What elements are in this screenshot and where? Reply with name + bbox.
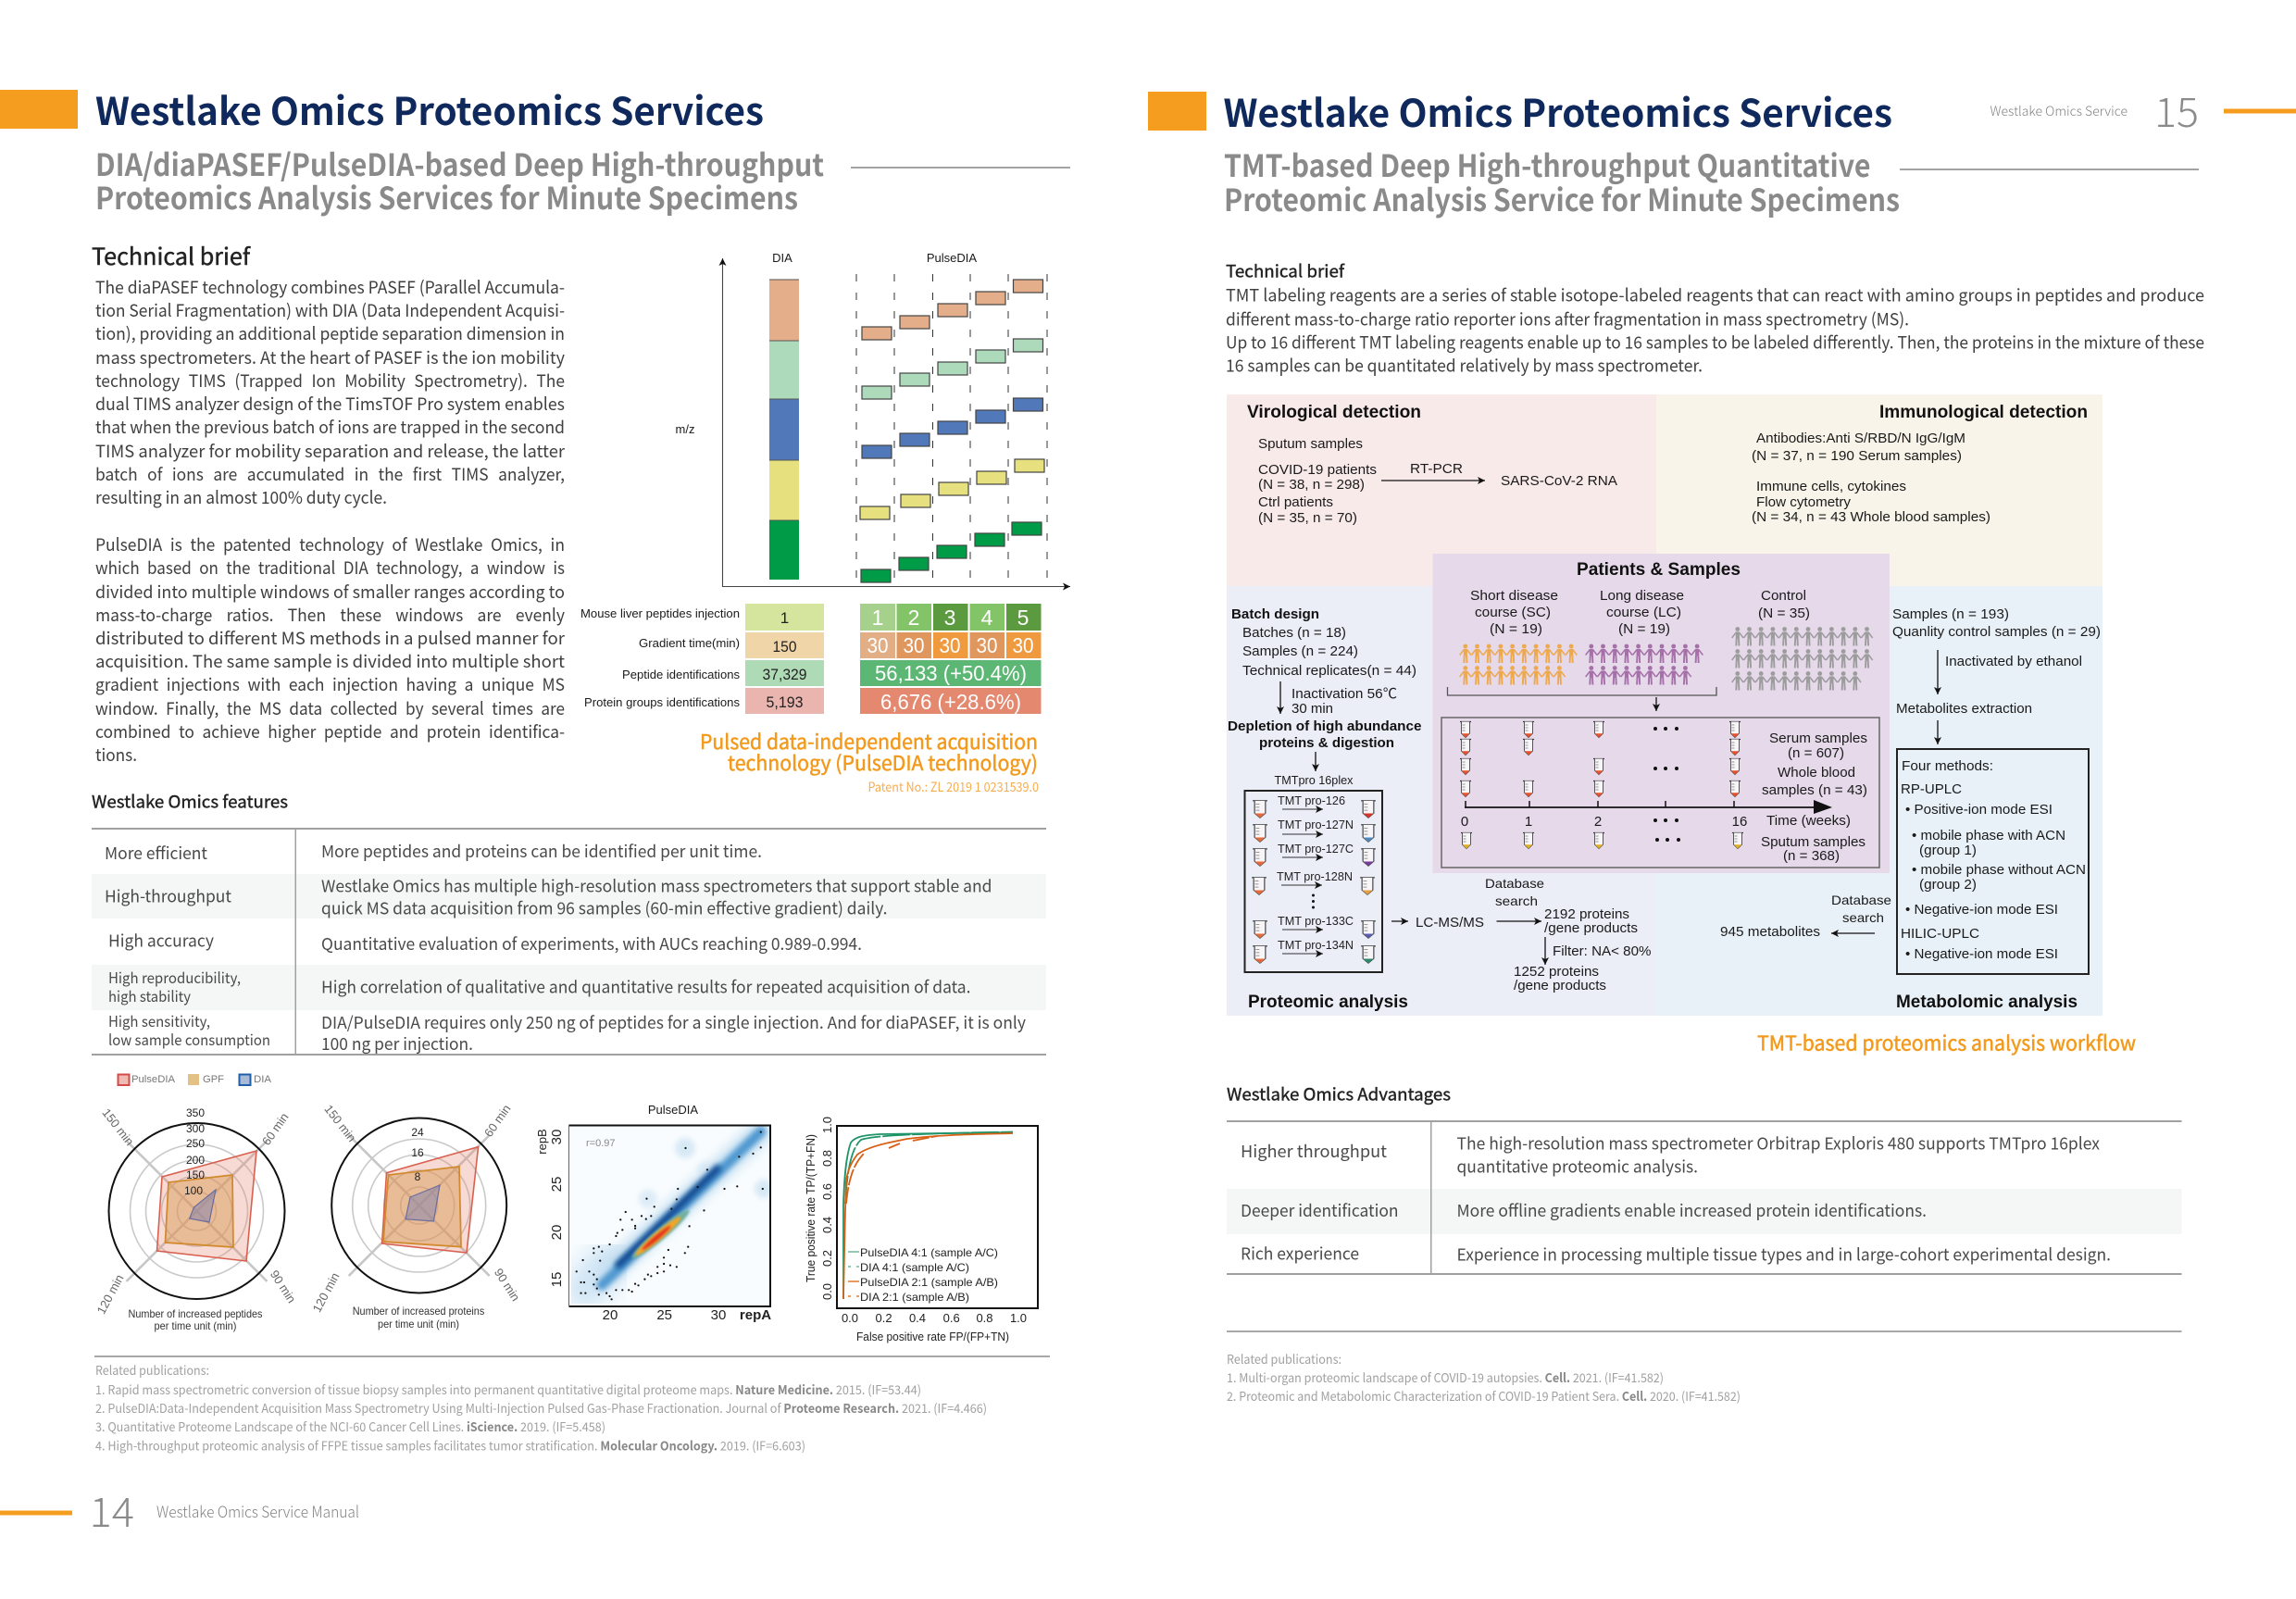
subtitle xyxy=(1224,142,1900,220)
text block: diaPASEF description: resulting in an almost 100% duty cycle. xyxy=(95,485,387,509)
text block: PulseDIA description: distributed to different MS methods in a pulsed manner for xyxy=(95,626,566,650)
text block: diaPASEF description: The diaPASEF technology combines PASEF (Parallel Accumula- xyxy=(95,275,565,299)
comparison table: DIA vs PulseDIA: 30 xyxy=(939,633,961,657)
panel: immunological detection: Immunological detection xyxy=(1879,403,2088,422)
radar chart: peptides: 250 xyxy=(186,1137,205,1150)
sample timeline box xyxy=(1441,718,1879,868)
radar chart: proteins xyxy=(310,1102,523,1330)
comparison table: DIA vs PulseDIA: 30 xyxy=(976,633,998,657)
radar chart: proteins: 16 xyxy=(411,1146,424,1159)
sample timeline box: samples (n = 43) xyxy=(1762,782,1867,798)
page footer xyxy=(0,1480,359,1539)
TMT labeling box: TMT pro-128N xyxy=(1277,870,1353,883)
table: features: High accuracy xyxy=(108,928,215,952)
orange header block xyxy=(1148,92,1206,131)
comparison table: DIA vs PulseDIA: 1 xyxy=(780,609,789,627)
subtitle: DIA/diaPASEF/PulseDIA-based Deep High-throughput xyxy=(95,141,824,185)
panel: metabolomic analysis: Metabolites extraction xyxy=(1896,701,2032,717)
comparison table: DIA vs PulseDIA: 30 xyxy=(1013,633,1033,657)
table: advantages xyxy=(1227,1120,2181,1275)
scatter plot: PulseDIA repA vs repB: r=0.97 xyxy=(586,1138,615,1149)
panel: proteomic analysis: /gene products xyxy=(1514,978,1606,993)
TMT labeling box: TMT pro-126 xyxy=(1278,794,1345,807)
panel: virological detection: (N = 35, n = 70) xyxy=(1258,510,1357,526)
TMT labeling box: TMT pro-127C xyxy=(1278,843,1354,856)
panel: patients and samples: Short disease xyxy=(1470,588,1558,604)
text block: diaPASEF description: TIMS analyzer for mobility separation and release, the latter xyxy=(95,439,566,463)
table: advantages: Deeper identification xyxy=(1241,1198,1398,1222)
panel: patients and samples: (N = 19) xyxy=(1618,621,1670,637)
table: features: low sample consumption xyxy=(108,1028,270,1050)
comparison table: DIA vs PulseDIA: Mouse liver peptides injection xyxy=(580,606,740,620)
radar chart: peptides: 90 min xyxy=(268,1268,299,1305)
text block: PulseDIA description: tions. xyxy=(95,743,137,767)
table: advantages: The high-resolution mass spectrometer Orbitrap Exploris 480 supports TMTpro 16plex xyxy=(1457,1131,2100,1156)
text block: PulseDIA description: combined to achieve higher peptide and protein identifica- xyxy=(95,719,565,743)
panel: proteomic analysis: 2192 proteins xyxy=(1544,906,1629,922)
ROC curve chart: PulseDIA 2:1 (sample A/B) xyxy=(860,1276,998,1289)
text block: diaPASEF description: batch of ions are accumulated in the first TIMS analyzer, xyxy=(95,462,565,486)
text block: PulseDIA description: gradient injections with each injection having a unique MS xyxy=(95,672,565,696)
scatter plot: PulseDIA repA vs repB: 20 xyxy=(603,1307,618,1323)
ROC curve chart: 0.6 xyxy=(820,1183,834,1200)
ROC curve chart: 0.2 xyxy=(876,1311,892,1325)
comparison table: DIA vs PulseDIA: 3 xyxy=(944,606,955,630)
text block: diaPASEF description xyxy=(95,275,566,509)
four methods box: • mobile phase without ACN xyxy=(1912,862,2086,878)
caption: workflow: TMT-based proteomics analysis workflow xyxy=(1757,1028,2136,1057)
panel: patients and samples: Patients & Samples xyxy=(1577,560,1741,580)
right page xyxy=(1148,80,2296,1405)
radar chart: peptides: 150 xyxy=(186,1168,205,1181)
page footer: 14 xyxy=(89,1480,134,1539)
heading: Westlake Omics features: Westlake Omics features xyxy=(92,789,288,813)
comparison table: DIA vs PulseDIA: 1 xyxy=(872,606,883,630)
legend: radar charts xyxy=(119,1074,272,1085)
text block: technical brief: 16 samples can be quantitated relatively by mass spectrometer. xyxy=(1226,354,1703,378)
text block: PulseDIA description xyxy=(95,532,566,767)
ROC curve chart: False positive rate FP/(FP+TN) xyxy=(856,1330,1009,1343)
subtitle: Proteomic Analysis Service for Minute Specimens xyxy=(1224,176,1900,220)
scatter plot: PulseDIA repA vs repB xyxy=(535,1103,773,1323)
sample timeline box: 16 xyxy=(1732,814,1747,830)
radar chart: proteins: 8 xyxy=(415,1170,421,1183)
radar chart: peptides: 200 xyxy=(186,1154,205,1167)
panel: proteomic analysis: 30 min xyxy=(1292,701,1333,717)
panel: virological detection: Virological detection xyxy=(1247,403,1421,422)
title: Westlake Omics Proteomics Services xyxy=(1224,82,1892,138)
sample timeline box: Whole blood xyxy=(1778,765,1855,781)
TMT labeling box: TMT pro-134N xyxy=(1278,939,1354,952)
panel: proteomic analysis: Samples (n = 224) xyxy=(1242,643,1358,659)
scatter plot: PulseDIA repA vs repB: 20 xyxy=(549,1225,565,1240)
panel: virological detection: COVID-19 patients xyxy=(1258,462,1377,478)
legend: radar charts: DIA xyxy=(254,1074,272,1085)
ROC curve chart: 0.4 xyxy=(909,1311,926,1325)
four methods box: (group 1) xyxy=(1919,843,1977,858)
radar chart: peptides: 350 xyxy=(186,1106,205,1119)
chart: DIA vs PulseDIA windows: DIA xyxy=(772,251,792,265)
table: features xyxy=(92,828,1046,1056)
text block: diaPASEF description: that when the previous batch of ions are trapped in the second xyxy=(95,415,565,439)
caption: PulseDIA technology: Pulsed data-independent acquisition xyxy=(700,726,1038,756)
sample timeline box: 2 xyxy=(1594,814,1602,830)
ROC curve chart: 0.2 xyxy=(820,1250,834,1267)
related publications xyxy=(95,1360,987,1454)
comparison table: DIA vs PulseDIA: 30 xyxy=(904,633,924,657)
radar chart: proteins: 60 min xyxy=(481,1102,514,1140)
panel: metabolomic analysis xyxy=(1656,586,2103,1016)
related publications: 1. Rapid mass spectrometric conversion of tissue biopsy samples into permanent quantitative digital proteome maps. Nature Medicine. 2015. (IF=53.44) xyxy=(95,1380,921,1398)
page header xyxy=(1990,80,2296,139)
ROC curve chart: 1.0 xyxy=(820,1117,834,1133)
panel: proteomic analysis: Proteomic analysis xyxy=(1248,993,1408,1012)
text block: technical brief xyxy=(1226,259,2204,378)
text block: PulseDIA description: PulseDIA is the patented technology of Westlake Omics, in xyxy=(95,532,565,556)
left page xyxy=(0,81,1070,1539)
panel: immunological detection: Immune cells, cytokines xyxy=(1756,479,1906,494)
panel: proteomic analysis: proteins & digestion xyxy=(1259,735,1394,751)
ROC curve chart: 0.6 xyxy=(943,1311,960,1325)
text block: diaPASEF description: mass spectrometers. At the heart of PASEF is the ion mobility xyxy=(95,345,565,369)
people icons: long disease course xyxy=(1586,644,1703,685)
panel: immunological detection: (N = 37, n = 190 Serum samples) xyxy=(1752,448,1962,464)
panel: patients and samples: Long disease xyxy=(1600,588,1684,604)
text block: PulseDIA description: acquisition. The same sample is divided into multiple short xyxy=(95,649,565,673)
panel: metabolomic analysis: Inactivated by ethanol xyxy=(1945,654,2082,669)
text block: technical brief: Up to 16 different TMT labeling reagents enable up to 16 samples to be labeled differently. Then, the proteins in the mixture of these xyxy=(1226,330,2204,354)
radar chart: proteins: 24 xyxy=(411,1126,424,1139)
subtitle: Proteomics Analysis Services for Minute Specimens xyxy=(95,174,798,219)
text block: diaPASEF description: tion Serial Fragmentation) with DIA (Data Independent Acquisi- xyxy=(95,298,565,322)
table: advantages: Higher throughput xyxy=(1241,1139,1387,1163)
table: features: High correlation of qualitative and quantitative results for repeated acquisition of data. xyxy=(321,974,970,998)
comparison table: DIA vs PulseDIA: Peptide identifications xyxy=(622,668,740,681)
radar chart: peptides: 300 xyxy=(186,1122,205,1135)
panel: patients and samples: (N = 19) xyxy=(1490,621,1542,637)
chart: DIA vs PulseDIA windows: PulseDIA xyxy=(927,251,977,265)
panel: proteomic analysis: 1252 proteins xyxy=(1514,964,1599,980)
radar chart: peptides: 100 xyxy=(184,1184,203,1197)
panel: proteomic analysis: Batch design xyxy=(1231,606,1319,622)
panel: proteomic analysis: Batches (n = 18) xyxy=(1242,625,1346,641)
comparison table: DIA vs PulseDIA: Gradient time(min) xyxy=(639,636,740,650)
scatter plot: PulseDIA repA vs repB: 25 xyxy=(549,1177,565,1192)
panel: proteomic analysis: Depletion of high abundance xyxy=(1228,718,1422,734)
heading: technical brief: Technical brief xyxy=(92,239,251,272)
sample timeline box: Time (weeks) xyxy=(1766,813,1851,829)
table: features: High sensitivity, xyxy=(108,1009,210,1031)
caption: PulseDIA technology: technology (PulseDIA technology) xyxy=(728,747,1038,777)
table: features: DIA/PulseDIA requires only 250 ng of peptides for a single injection. And for diaPASEF, it is only xyxy=(321,1010,1027,1034)
panel: proteomic analysis: search xyxy=(1495,893,1538,908)
TMT labeling box: TMT pro-127N xyxy=(1278,818,1354,831)
legend: radar charts: GPF xyxy=(203,1074,224,1085)
radar chart: proteins: 120 min xyxy=(310,1270,343,1315)
panel: proteomic analysis: TMTpro 16plex xyxy=(1274,773,1354,787)
table: advantages: Experience in processing multiple tissue types and in large-cohort experimental design. xyxy=(1457,1243,2111,1267)
ROC curve chart xyxy=(804,1117,1038,1343)
table: features: More peptides and proteins can be identified per unit time. xyxy=(321,839,762,863)
four methods box: Four methods: xyxy=(1902,758,1993,774)
heading: Westlake Omics Advantages: Westlake Omics Advantages xyxy=(1227,1081,1451,1106)
ROC curve chart: True positive rate TP/(TP+FN) xyxy=(804,1134,817,1282)
workflow figure xyxy=(1227,394,2103,1016)
radar chart: peptides: per time unit (min) xyxy=(154,1319,237,1332)
panel: proteomic analysis: /gene products xyxy=(1544,920,1638,936)
subtitle: TMT-based Deep High-throughput Quantitative xyxy=(1224,142,1870,186)
panel: metabolomic analysis: search xyxy=(1842,910,1884,925)
panel: immunological detection: Antibodies:Anti S/RBD/N IgG/IgM xyxy=(1756,431,1965,446)
text block: PulseDIA description: mass-to-charge ratios. Then these windows are evenly xyxy=(95,603,565,627)
panel: immunological detection: (N = 34, n = 43 Whole blood samples) xyxy=(1752,509,1990,525)
chart: DIA vs PulseDIA windows: m/z xyxy=(676,422,694,436)
comparison table: DIA vs PulseDIA: 2 xyxy=(908,606,919,630)
ROC curve chart: 0.4 xyxy=(820,1217,834,1233)
four methods box: • Negative-ion mode ESI xyxy=(1905,902,2058,918)
radar chart: proteins: 150 min xyxy=(321,1102,359,1144)
comparison table: DIA vs PulseDIA xyxy=(580,604,1041,714)
table: features: Quantitative evaluation of experiments, with AUCs reaching 0.989-0.994. xyxy=(321,931,862,956)
scatter plot: PulseDIA repA vs repB: repB xyxy=(535,1129,549,1155)
panel: proteomic analysis: LC-MS/MS xyxy=(1416,915,1484,931)
ROC curve chart: DIA 4:1 (sample A/C) xyxy=(860,1261,969,1274)
panel: patients and samples: Control xyxy=(1761,588,1806,604)
table: features: More efficient xyxy=(105,841,207,865)
ROC curve chart: PulseDIA 4:1 (sample A/C) xyxy=(860,1246,998,1259)
radar chart: peptides: Number of increased peptides xyxy=(128,1307,263,1320)
panel: metabolomic analysis: Samples (n = 193) xyxy=(1892,606,2009,622)
table: features: quick MS data acquisition from 96 samples (60-min effective gradient) daily. xyxy=(321,896,887,920)
four methods box xyxy=(1897,749,2089,974)
panel: patients and samples: course (SC) xyxy=(1475,605,1551,620)
text block: PulseDIA description: which based on the traditional DIA technology, a window is xyxy=(95,556,565,580)
sample timeline box: Serum samples xyxy=(1769,731,1867,746)
scatter plot: PulseDIA repA vs repB: 30 xyxy=(549,1130,565,1144)
four methods box: • Negative-ion mode ESI xyxy=(1905,946,2058,962)
subtitle xyxy=(95,141,824,219)
panel: immunological detection xyxy=(1656,394,2103,586)
related publications: 4. High-throughput proteomic analysis of FFPE tissue samples facilitates tumor stratification. Molecular Oncology. 2019. (IF=6.603) xyxy=(95,1435,805,1454)
ROC curve chart: DIA 2:1 (sample A/B) xyxy=(860,1291,969,1304)
radar chart: proteins: 90 min xyxy=(492,1266,523,1304)
four methods box: • mobile phase with ACN xyxy=(1912,828,2065,843)
panel: metabolomic analysis: Quanlity control samples (n = 29) xyxy=(1892,624,2101,640)
comparison table: DIA vs PulseDIA: 30 xyxy=(867,633,889,657)
text block: PulseDIA description: window. Finally, the MS data collected by several times are xyxy=(95,696,565,720)
comparison table: DIA vs PulseDIA: 37,329 xyxy=(763,666,807,683)
ROC curve chart: 1.0 xyxy=(1010,1311,1027,1325)
panel: virological detection: SARS-CoV-2 RNA xyxy=(1501,473,1617,489)
panel: virological detection xyxy=(1227,394,1656,586)
panel: proteomic analysis xyxy=(1227,586,1656,1016)
people icons: short disease course xyxy=(1460,644,1577,685)
related publications xyxy=(1227,1349,1741,1405)
comparison table: DIA vs PulseDIA: 5 xyxy=(1017,606,1029,630)
panel: patients and samples xyxy=(1433,554,1890,873)
ROC curve chart: 0.8 xyxy=(820,1150,834,1167)
page footer: Westlake Omics Service Manual xyxy=(156,1499,359,1522)
four methods box: HILIC-UPLC xyxy=(1901,926,1979,942)
table: advantages: More offline gradients enable increased protein identifications. xyxy=(1457,1198,1927,1222)
caption: PulseDIA technology xyxy=(700,726,1039,796)
scatter plot: PulseDIA repA vs repB: 30 xyxy=(711,1307,726,1323)
legend: radar charts: PulseDIA xyxy=(131,1074,176,1085)
four methods box: RP-UPLC xyxy=(1901,781,1962,797)
sample timeline box: Sputum samples xyxy=(1761,834,1866,850)
panel: metabolomic analysis: Metabolomic analysis xyxy=(1896,993,2078,1012)
text block: technical brief: TMT labeling reagents are a series of stable isotope-labeled reagents that can react with amino groups in peptides and produce xyxy=(1226,283,2204,307)
sample timeline box: (n = 607) xyxy=(1788,745,1844,761)
related publications: 2. Proteomic and Metabolomic Characterization of COVID-19 Patient Sera. Cell. 2020. (IF=41.582) xyxy=(1227,1386,1741,1405)
table: features: 100 ng per injection. xyxy=(321,1031,473,1056)
panel: proteomic analysis: Technical replicates(n = 44) xyxy=(1242,663,1416,679)
panel: patients and samples: (N = 35) xyxy=(1758,606,1810,621)
panel: proteomic analysis: Inactivation 56℃ xyxy=(1292,686,1397,702)
chart: DIA vs PulseDIA windows xyxy=(676,251,1070,587)
people icons: control xyxy=(1732,627,1873,691)
text block: diaPASEF description: technology TIMS (Trapped Ion Mobility Spectrometry). The xyxy=(95,369,565,393)
panel: proteomic analysis: Database xyxy=(1485,876,1544,891)
comparison table: DIA vs PulseDIA: 150 xyxy=(772,638,796,656)
text block: diaPASEF description: tion), providing an additional peptide separation dimension in xyxy=(95,321,565,345)
panel: virological detection: Sputum samples xyxy=(1258,436,1363,452)
panel: metabolomic analysis: Database xyxy=(1831,893,1891,907)
table: advantages: Rich experience xyxy=(1241,1241,1359,1265)
ROC curve chart: 0.0 xyxy=(820,1283,834,1300)
text block: diaPASEF description: dual TIMS analyzer design of the TimsTOF Pro system enables xyxy=(95,392,565,416)
sample timeline box: (n = 368) xyxy=(1783,848,1840,864)
orange header block xyxy=(0,90,78,129)
ROC curve chart: 0.0 xyxy=(842,1311,858,1325)
table: features: high stability xyxy=(108,984,192,1006)
comparison table: DIA vs PulseDIA: 5,193 xyxy=(767,693,804,711)
panel: metabolomic analysis: 945 metabolites xyxy=(1720,924,1820,940)
scatter plot: PulseDIA repA vs repB: PulseDIA xyxy=(648,1103,698,1117)
table: features: Westlake Omics has multiple high-resolution mass spectrometers that support stable and xyxy=(321,874,992,898)
TMT labeling box xyxy=(1244,791,1382,972)
panel: virological detection: Ctrl patients xyxy=(1258,494,1333,510)
four methods box: (group 2) xyxy=(1919,877,1977,893)
text block: technical brief: Technical brief xyxy=(1226,259,1345,283)
radar chart: proteins: Number of increased proteins xyxy=(353,1305,484,1318)
ROC curve chart: 0.8 xyxy=(976,1311,993,1325)
TMT labeling box: TMT pro-133C xyxy=(1278,915,1354,928)
scatter plot: PulseDIA repA vs repB: repA xyxy=(740,1307,771,1323)
radar chart: proteins: per time unit (min) xyxy=(378,1318,459,1330)
page header: Westlake Omics Service xyxy=(1990,102,2128,120)
panel: virological detection: (N = 38, n = 298) xyxy=(1258,477,1365,493)
scatter plot: PulseDIA repA vs repB: 25 xyxy=(656,1307,672,1323)
related publications: Related publications: xyxy=(1227,1349,1341,1368)
text block: PulseDIA description: divided into multiple windows of smaller ranges according to xyxy=(95,580,565,604)
radar chart: peptides: 120 min xyxy=(94,1272,127,1317)
panel: immunological detection: Flow cytometry xyxy=(1756,494,1851,510)
scatter plot: PulseDIA repA vs repB: 15 xyxy=(549,1272,565,1287)
text block: technical brief: different mass-to-charge ratio reporter ions after fragmentation in mass spectrometry (MS). xyxy=(1226,307,1909,331)
title: Westlake Omics Proteomics Services xyxy=(95,81,764,136)
radar chart: peptides: 150 min xyxy=(99,1106,137,1148)
radar chart: peptides xyxy=(94,1106,299,1332)
comparison table: DIA vs PulseDIA: Protein groups identifications xyxy=(584,695,740,709)
table: features: High reproducibility, xyxy=(108,966,241,988)
related publications: 1. Multi-organ proteomic landscape of COVID-19 autopsies. Cell. 2021. (IF=41.582) xyxy=(1227,1368,1664,1386)
comparison table: DIA vs PulseDIA: 56,133 (+50.4%) xyxy=(875,661,1027,685)
panel: proteomic analysis: Filter: NA< 80% xyxy=(1553,943,1652,959)
sample timeline box: 1 xyxy=(1525,814,1532,830)
caption: PulseDIA technology: Patent No.: ZL 2019 1 0231539.0 xyxy=(868,778,1039,796)
four methods box: • Positive-ion mode ESI xyxy=(1905,802,2053,818)
related publications: 2. PulseDIA:Data-Independent Acquisition Mass Spectrometry Using Multi-Injection Pulsed Gas-Phase Fractionation. Journal of Proteome Research. 2021. (IF=4.466) xyxy=(95,1398,987,1417)
comparison table: DIA vs PulseDIA: 6,676 (+28.6%) xyxy=(880,690,1021,714)
table: advantages: quantitative proteomic analysis. xyxy=(1457,1154,1698,1178)
page header: 15 xyxy=(2154,80,2199,139)
comparison table: DIA vs PulseDIA: 4 xyxy=(981,606,993,630)
table: features: High-throughput xyxy=(105,883,231,907)
panel: virological detection: RT-PCR xyxy=(1410,461,1463,477)
sample timeline box: 0 xyxy=(1461,814,1468,830)
related publications: Related publications: xyxy=(95,1360,209,1379)
panel: patients and samples: course (LC) xyxy=(1606,605,1681,620)
related publications: 3. Quantitative Proteome Landscape of the NCI-60 Cancer Cell Lines. iScience. 2019. (IF=5.458) xyxy=(95,1417,605,1435)
radar chart: peptides: 60 min xyxy=(259,1110,292,1148)
